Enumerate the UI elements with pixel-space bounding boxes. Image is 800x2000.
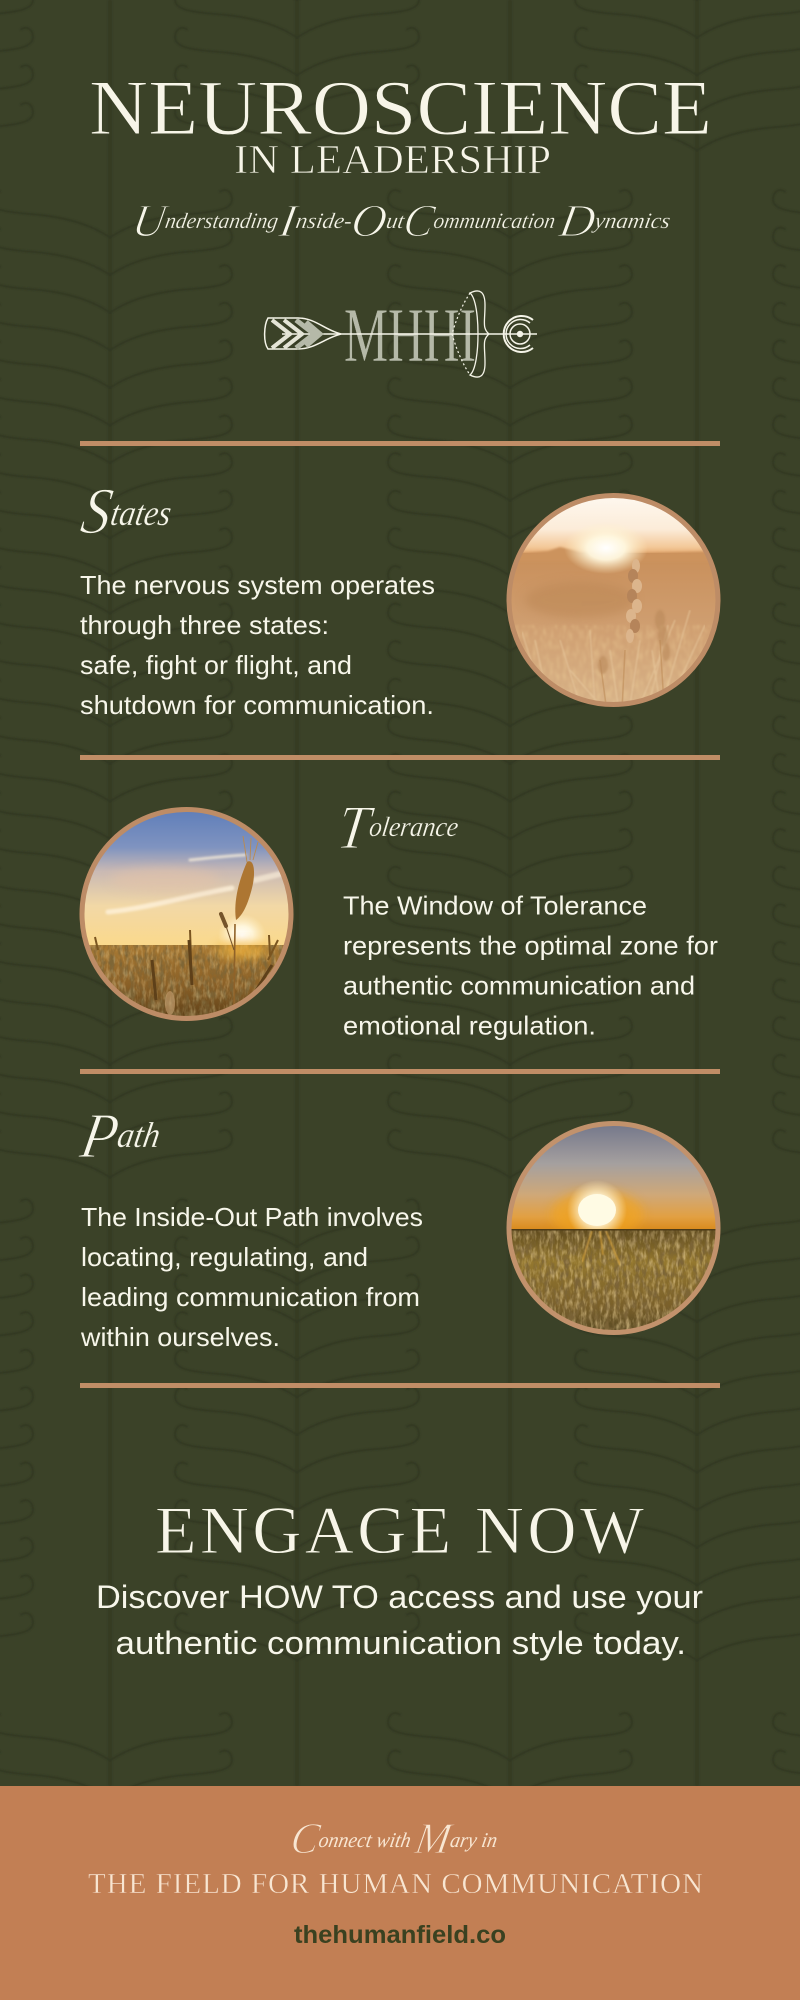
heading: States: S [76, 475, 118, 548]
text block: Path: within ourselves. [80, 1322, 280, 1352]
divider 2 [80, 755, 720, 760]
subtitle: script tagline: ut [384, 208, 407, 233]
text block: Path [80, 1202, 423, 1352]
subtitle: script tagline: C [400, 196, 439, 247]
divider 4 [80, 1383, 720, 1388]
logo lettering: MHHI [344, 292, 476, 378]
footer script line: C [287, 1813, 324, 1863]
heading: Tolerance: T [333, 793, 378, 862]
call to action: Engage Now [96, 1492, 703, 1661]
heading: Tolerance: olerance [367, 812, 460, 843]
panel: Tolerance [80, 793, 718, 1040]
photo: sun over wheat field [505, 1120, 725, 1339]
text block: Path: The Inside-Out Path involves [81, 1202, 423, 1232]
text block: Tolerance: emotional regulation. [343, 1010, 596, 1040]
title: Neuroscience in Leadership: IN LEADERSHIP [234, 136, 551, 182]
subtitle: script tagline: I [275, 196, 303, 247]
subtitle: script tagline: nderstanding [163, 208, 280, 233]
text block: States [80, 570, 435, 720]
panel: Path [75, 1100, 725, 1352]
divider 3 [80, 1069, 720, 1074]
text block: Tolerance [343, 890, 718, 1040]
heading: Path: P [75, 1100, 124, 1171]
subtitle: script tagline: ynamics [591, 208, 672, 233]
subtitle: script tagline [129, 196, 675, 247]
icon: arrow fletching, bow and target [265, 291, 537, 377]
footer website: thehumanfield.co [294, 1921, 506, 1949]
text block: Tolerance: The Window of Tolerance [343, 890, 647, 920]
title: Neuroscience in Leadership: NEUROSCIENCE [89, 64, 712, 151]
call to action: Engage Now: authentic communication style today. [116, 1625, 686, 1661]
text block: Tolerance: authentic communication and [343, 970, 695, 1000]
text block: Path: locating, regulating, and [81, 1242, 368, 1272]
text block: States: through three states: [80, 610, 329, 640]
panel: States [76, 475, 725, 720]
photo: wheat at sunrise, sepia [505, 490, 725, 715]
heading: Path: ath [114, 1115, 164, 1155]
footer script line: M [411, 1813, 457, 1863]
photo: wheat against blue sunset sky [80, 808, 294, 1025]
text block: States: safe, fight or flight, and [80, 650, 352, 680]
subtitle: script tagline: nside- [294, 208, 354, 233]
subtitle: script tagline: ommunication [432, 208, 557, 233]
footer band [0, 1786, 800, 2000]
subtitle: script tagline: O [347, 196, 391, 247]
call to action: Engage Now: Discover HOW TO access and use your [96, 1579, 703, 1615]
heading: States: tates [108, 493, 175, 533]
logo: arrow with MHHIC monogram [265, 291, 537, 378]
text block: States: The nervous system operates [80, 570, 435, 600]
subtitle: script tagline: D [555, 196, 599, 247]
subtitle: script tagline: U [129, 196, 172, 247]
text block: Path: leading communication from [81, 1282, 420, 1312]
footer script line: onnect with [317, 1828, 418, 1852]
divider 1 [80, 441, 720, 446]
call to action: Engage Now: ENGAGE NOW [155, 1492, 645, 1568]
text block: States: shutdown for communication. [80, 690, 434, 720]
footer organisation name: THE FIELD FOR HUMAN COMMUNICATION [88, 1868, 703, 1900]
text block: Tolerance: represents the optimal zone for [343, 930, 718, 960]
footer script line: ary in [448, 1828, 499, 1852]
